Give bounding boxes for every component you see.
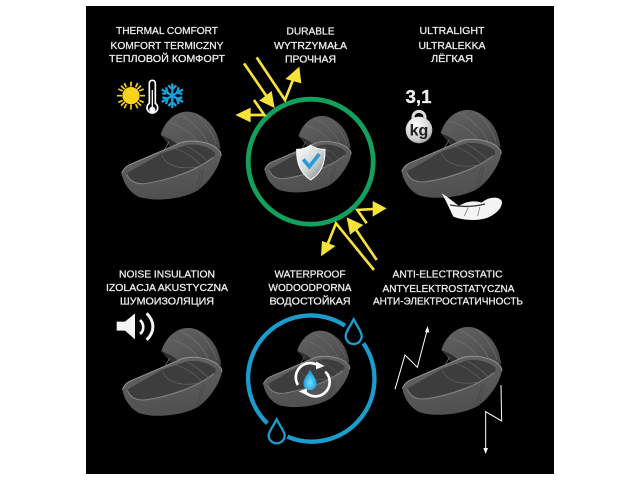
panel: ultralight bbox=[402, 26, 502, 220]
heading: noise insulation: ШУМОИЗОЛЯЦИЯ bbox=[120, 296, 214, 308]
weight value: 3,1 bbox=[406, 87, 432, 107]
heading: anti-electrostatic bbox=[373, 270, 523, 308]
heading: durable: ПРОЧНАЯ bbox=[285, 54, 336, 66]
heading: ultralight: ЛЁГКАЯ bbox=[431, 53, 473, 65]
heading: thermal comfort bbox=[109, 26, 225, 65]
icon: snowflake bbox=[162, 83, 183, 108]
panel: waterproof bbox=[248, 270, 374, 443]
icon: lightning arrow down bbox=[483, 385, 502, 454]
heading: waterproof: WATERPROOF bbox=[274, 270, 346, 280]
black background panel bbox=[86, 6, 554, 474]
heading: durable bbox=[274, 26, 347, 66]
heading: noise insulation: IZOLACJA AKUSTYCZNA bbox=[106, 283, 228, 294]
arrows: deflected impacts lower right bbox=[321, 201, 387, 270]
heading: noise insulation bbox=[106, 270, 228, 308]
heading: durable: DURABLE bbox=[286, 26, 335, 38]
icon: sun bbox=[117, 82, 145, 110]
heading: noise insulation: NOISE INSULATION bbox=[119, 270, 215, 280]
panel: anti-electrostatic bbox=[373, 270, 523, 454]
carrycot image bbox=[122, 112, 221, 200]
heading: waterproof: ВОДОСТОЙКАЯ bbox=[270, 294, 350, 308]
heading: thermal comfort: KOMFORT TERMICZNY bbox=[110, 41, 224, 52]
icon: kg weight bbox=[406, 111, 432, 143]
heading: anti-electrostatic: ANTI-ELECTROSTATIC bbox=[392, 270, 502, 280]
carrycot image bbox=[263, 331, 350, 407]
panel: thermal comfort bbox=[109, 26, 225, 200]
heading: thermal comfort: ТЕПЛОВОЙ КОМФОРТ bbox=[109, 52, 225, 65]
heading: waterproof bbox=[268, 270, 352, 308]
heading: thermal comfort: THERMAL COMFORT bbox=[116, 26, 218, 37]
icon: thermometer bbox=[147, 80, 158, 113]
icon: lightning arrow up bbox=[395, 326, 429, 389]
heading: waterproof: WODOODPORNA bbox=[268, 283, 352, 294]
heading: anti-electrostatic: ANTYELEKTROSTATYCZNA bbox=[382, 284, 515, 295]
heading: ultralight: ULTRALEKKA bbox=[418, 41, 486, 52]
icon: speaker bbox=[117, 313, 153, 340]
panel: durable bbox=[235, 26, 387, 270]
blue ring with water drops bbox=[248, 315, 374, 443]
arrows: deflected impacts upper left bbox=[235, 57, 301, 122]
heading: ultralight bbox=[418, 26, 486, 65]
carrycot image bbox=[122, 328, 222, 416]
heading: durable: WYTRZYMAŁA bbox=[274, 41, 347, 52]
icon: drop with cycle arrows bbox=[296, 361, 330, 396]
carrycot image bbox=[265, 116, 351, 192]
carrycot image bbox=[402, 110, 501, 198]
icon: kg weight: kg bbox=[410, 123, 428, 140]
heading: anti-electrostatic: АНТИ-ЭЛЕКТРОСТАТИЧНОСТЬ bbox=[373, 296, 523, 308]
heading: ultralight: ULTRALIGHT bbox=[420, 26, 484, 37]
green ring bbox=[248, 99, 373, 224]
icon: shield bbox=[297, 145, 325, 180]
panel: noise insulation bbox=[106, 270, 228, 416]
carrycot image bbox=[402, 327, 502, 415]
icon: feather bbox=[442, 193, 502, 220]
